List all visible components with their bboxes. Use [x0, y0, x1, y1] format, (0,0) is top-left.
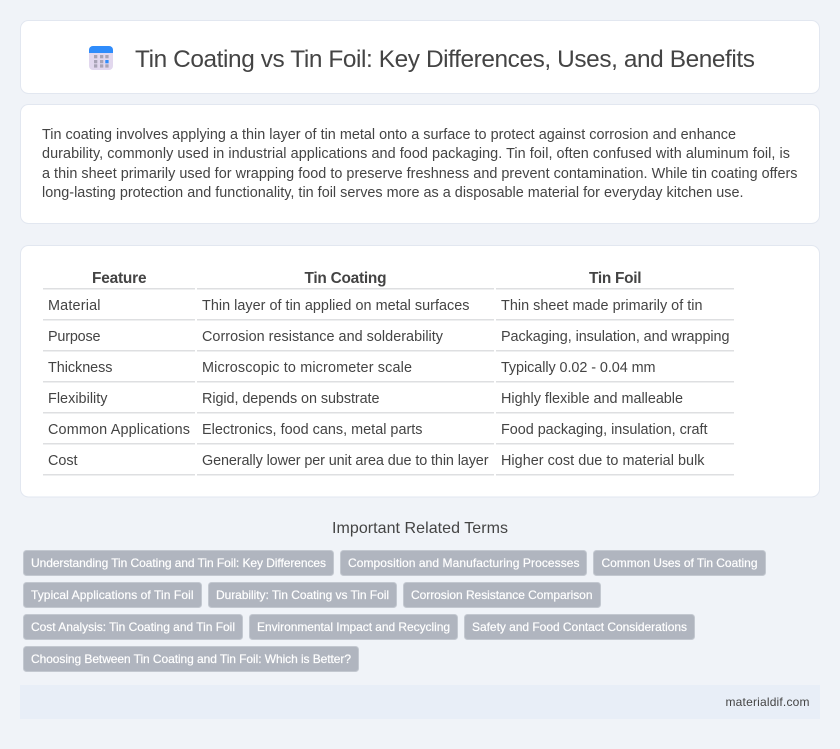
table row: material: Thin layer of tin applied on metal surfaces — [202, 298, 470, 314]
heading: important related terms: Important Related Terms — [332, 520, 508, 537]
table row: flexibility: Rigid, depends on substrate — [202, 391, 380, 407]
tag: cost analysis: Cost Analysis: Tin Coating and Tin Foil — [31, 620, 235, 634]
icon: calendar — [89, 46, 113, 70]
text block: description: long-lasting protection and functionality, tin foil serves more as a disposable material for everyday kitchen use. — [42, 185, 744, 201]
tag: corrosion resistance: Corrosion Resistance Comparison — [411, 588, 592, 602]
tag: typical applications: Typical Applications of Tin Foil — [31, 588, 194, 602]
related term tags — [24, 550, 766, 672]
table row: cost — [48, 453, 705, 469]
tag: understanding — [24, 550, 334, 576]
tag: cost analysis — [24, 614, 242, 640]
table row: thickness: Thickness — [48, 360, 112, 376]
table row: cost: Cost — [48, 453, 78, 469]
table row: cost: Higher cost due to material bulk — [501, 453, 705, 469]
table row: purpose: Corrosion resistance and solderability — [202, 329, 444, 345]
tag: composition — [340, 550, 586, 576]
table row: material — [48, 298, 702, 314]
table row: thickness: Typically 0.02 - 0.04 mm — [501, 360, 656, 376]
table header row — [92, 270, 642, 287]
table row: purpose — [48, 329, 730, 345]
header panel — [20, 20, 820, 94]
tag: durability — [208, 582, 396, 608]
tag: environmental impact — [250, 614, 458, 640]
table row: material: Material — [48, 298, 100, 314]
tag: safety — [464, 614, 694, 640]
text block: description — [42, 127, 798, 201]
table row: common applications: Common Applications — [48, 422, 190, 438]
table row: thickness: Microscopic to micrometer scale — [202, 360, 412, 376]
table row: purpose: Packaging, insulation, and wrapping — [501, 329, 730, 345]
table row: cost: Generally lower per unit area due to thin layer — [202, 453, 489, 469]
tag: durability: Durability: Tin Coating vs Tin Foil — [216, 588, 389, 602]
table row: flexibility: Highly flexible and malleable — [501, 391, 683, 407]
tag: common uses — [594, 550, 766, 576]
tag: environmental impact: Environmental Impact and Recycling — [257, 620, 450, 634]
table row: common applications: Food packaging, insulation, craft — [501, 422, 708, 438]
tag: corrosion resistance — [404, 582, 600, 608]
title: Tin Coating vs Tin Foil: Key Differences, Uses, and Benefits — [135, 46, 755, 73]
tag: choosing — [24, 646, 358, 672]
table header row: Tin Foil — [589, 270, 642, 287]
footer bar — [20, 685, 820, 719]
table row: thickness — [48, 360, 656, 376]
table row: purpose: Purpose — [48, 329, 100, 345]
tag: typical applications — [24, 582, 202, 608]
table header row: Tin Coating — [304, 270, 386, 287]
text block: description: a thin sheet primarily used for wrapping food to preserve freshness and prevent contamination. While tin coating offers — [42, 166, 798, 182]
table header row: Feature — [92, 270, 147, 287]
panel: introduction paragraph — [20, 104, 820, 224]
table row: flexibility: Flexibility — [48, 391, 108, 407]
table row: common applications: Electronics, food cans, metal parts — [202, 422, 422, 438]
panel: comparison table — [20, 246, 820, 497]
tag: composition: Composition and Manufacturing Processes — [348, 556, 580, 570]
table row: common applications — [48, 422, 708, 438]
text block: description: durability, commonly used in industrial applications and food packaging. Tin foil, often confused with aluminum foil, is — [42, 146, 790, 162]
tag: choosing: Choosing Between Tin Coating and Tin Foil: Which is Better? — [31, 652, 351, 666]
footer source text: materialdif.com — [726, 695, 810, 709]
table row: material: Thin sheet made primarily of tin — [501, 298, 702, 314]
tag: understanding: Understanding Tin Coating and Tin Foil: Key Differences — [31, 556, 326, 570]
table row: flexibility — [48, 391, 683, 407]
tag: safety: Safety and Food Contact Considerations — [472, 620, 687, 634]
text block: description: Tin coating involves applying a thin layer of tin metal onto a surface to protect against corrosion and enhance — [42, 127, 736, 143]
tag: common uses: Common Uses of Tin Coating — [602, 556, 758, 570]
